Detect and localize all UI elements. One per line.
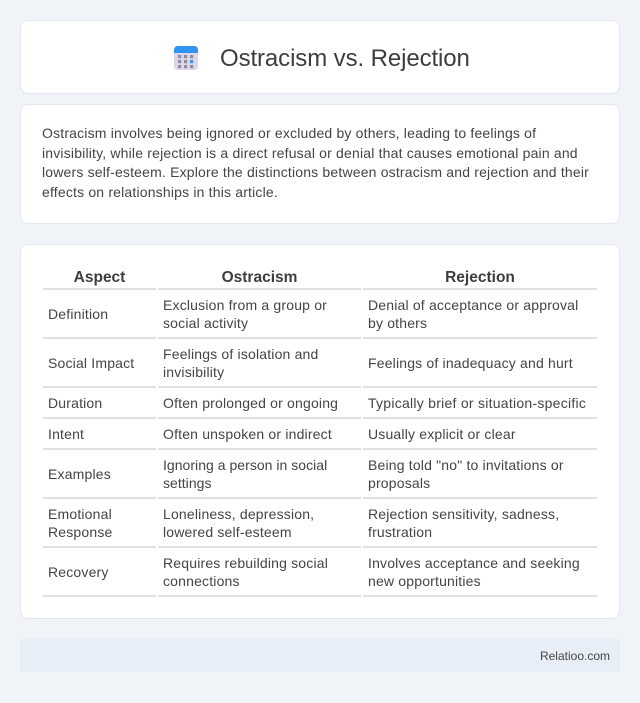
title: Ostracism vs. Rejection bbox=[220, 45, 470, 72]
table header: Rejection bbox=[445, 269, 515, 286]
row: duration: Typically brief or situation-specific bbox=[368, 395, 586, 411]
row: emotional response: Response bbox=[48, 524, 112, 540]
panel: comparison table bbox=[20, 244, 620, 619]
row: examples: Examples bbox=[48, 466, 111, 482]
row: emotional response: Loneliness, depression, bbox=[163, 506, 314, 522]
text block: introduction: Ostracism involves being ignored or excluded by others, leading to feelings of bbox=[42, 125, 536, 141]
row: emotional response: Rejection sensitivity, sadness, bbox=[368, 506, 559, 522]
row: duration bbox=[48, 395, 586, 411]
icon: calendar bbox=[174, 46, 198, 70]
text block: introduction bbox=[42, 125, 589, 200]
row: recovery: new opportunities bbox=[368, 573, 481, 589]
row: emotional response: frustration bbox=[368, 524, 432, 540]
text block: introduction: invisibility, while rejection is a direct refusal or denial that causes emotional pain and bbox=[42, 145, 578, 161]
row: examples: Ignoring a person in social bbox=[163, 457, 327, 473]
row: social impact: Feelings of isolation and bbox=[163, 346, 318, 362]
row: emotional response: lowered self-esteem bbox=[163, 524, 292, 540]
row: social impact: Feelings of inadequacy and hurt bbox=[368, 355, 573, 371]
row: social impact: Social Impact bbox=[48, 355, 134, 371]
row: recovery: connections bbox=[163, 573, 240, 589]
row: intent: Intent bbox=[48, 426, 84, 442]
row: duration: Duration bbox=[48, 395, 102, 411]
row: definition: Exclusion from a group or bbox=[163, 297, 327, 313]
row: definition: Definition bbox=[48, 306, 108, 322]
panel: header bbox=[20, 20, 620, 94]
row: intent bbox=[48, 426, 516, 442]
row: recovery bbox=[48, 555, 580, 589]
row: recovery: Requires rebuilding social bbox=[163, 555, 328, 571]
row: recovery: Recovery bbox=[48, 564, 109, 580]
row: intent: Often unspoken or indirect bbox=[163, 426, 332, 442]
row: examples: settings bbox=[163, 475, 212, 491]
footer bbox=[20, 639, 620, 672]
table header: Aspect bbox=[74, 269, 125, 286]
footer text: Relatioo.com bbox=[540, 649, 610, 663]
row: social impact: invisibility bbox=[163, 364, 224, 380]
row: definition bbox=[48, 297, 578, 331]
row: emotional response: Emotional bbox=[48, 506, 112, 522]
row: social impact bbox=[48, 346, 573, 380]
panel: introduction bbox=[20, 104, 620, 224]
row: emotional response bbox=[48, 506, 559, 540]
text block: introduction: lowers self-esteem. Explore the distinctions between ostracism and rejection and their bbox=[42, 164, 589, 180]
table header: Ostracism bbox=[222, 269, 297, 286]
row: duration: Often prolonged or ongoing bbox=[163, 395, 338, 411]
row: definition: by others bbox=[368, 315, 427, 331]
row: definition: social activity bbox=[163, 315, 248, 331]
row: examples: proposals bbox=[368, 475, 430, 491]
row: definition: Denial of acceptance or approval bbox=[368, 297, 578, 313]
row: intent: Usually explicit or clear bbox=[368, 426, 516, 442]
row: examples bbox=[48, 457, 564, 491]
row: examples: Being told "no" to invitations or bbox=[368, 457, 564, 473]
table header bbox=[74, 269, 515, 286]
row: recovery: Involves acceptance and seeking bbox=[368, 555, 580, 571]
text block: introduction: effects on relationships in this article. bbox=[42, 184, 278, 200]
